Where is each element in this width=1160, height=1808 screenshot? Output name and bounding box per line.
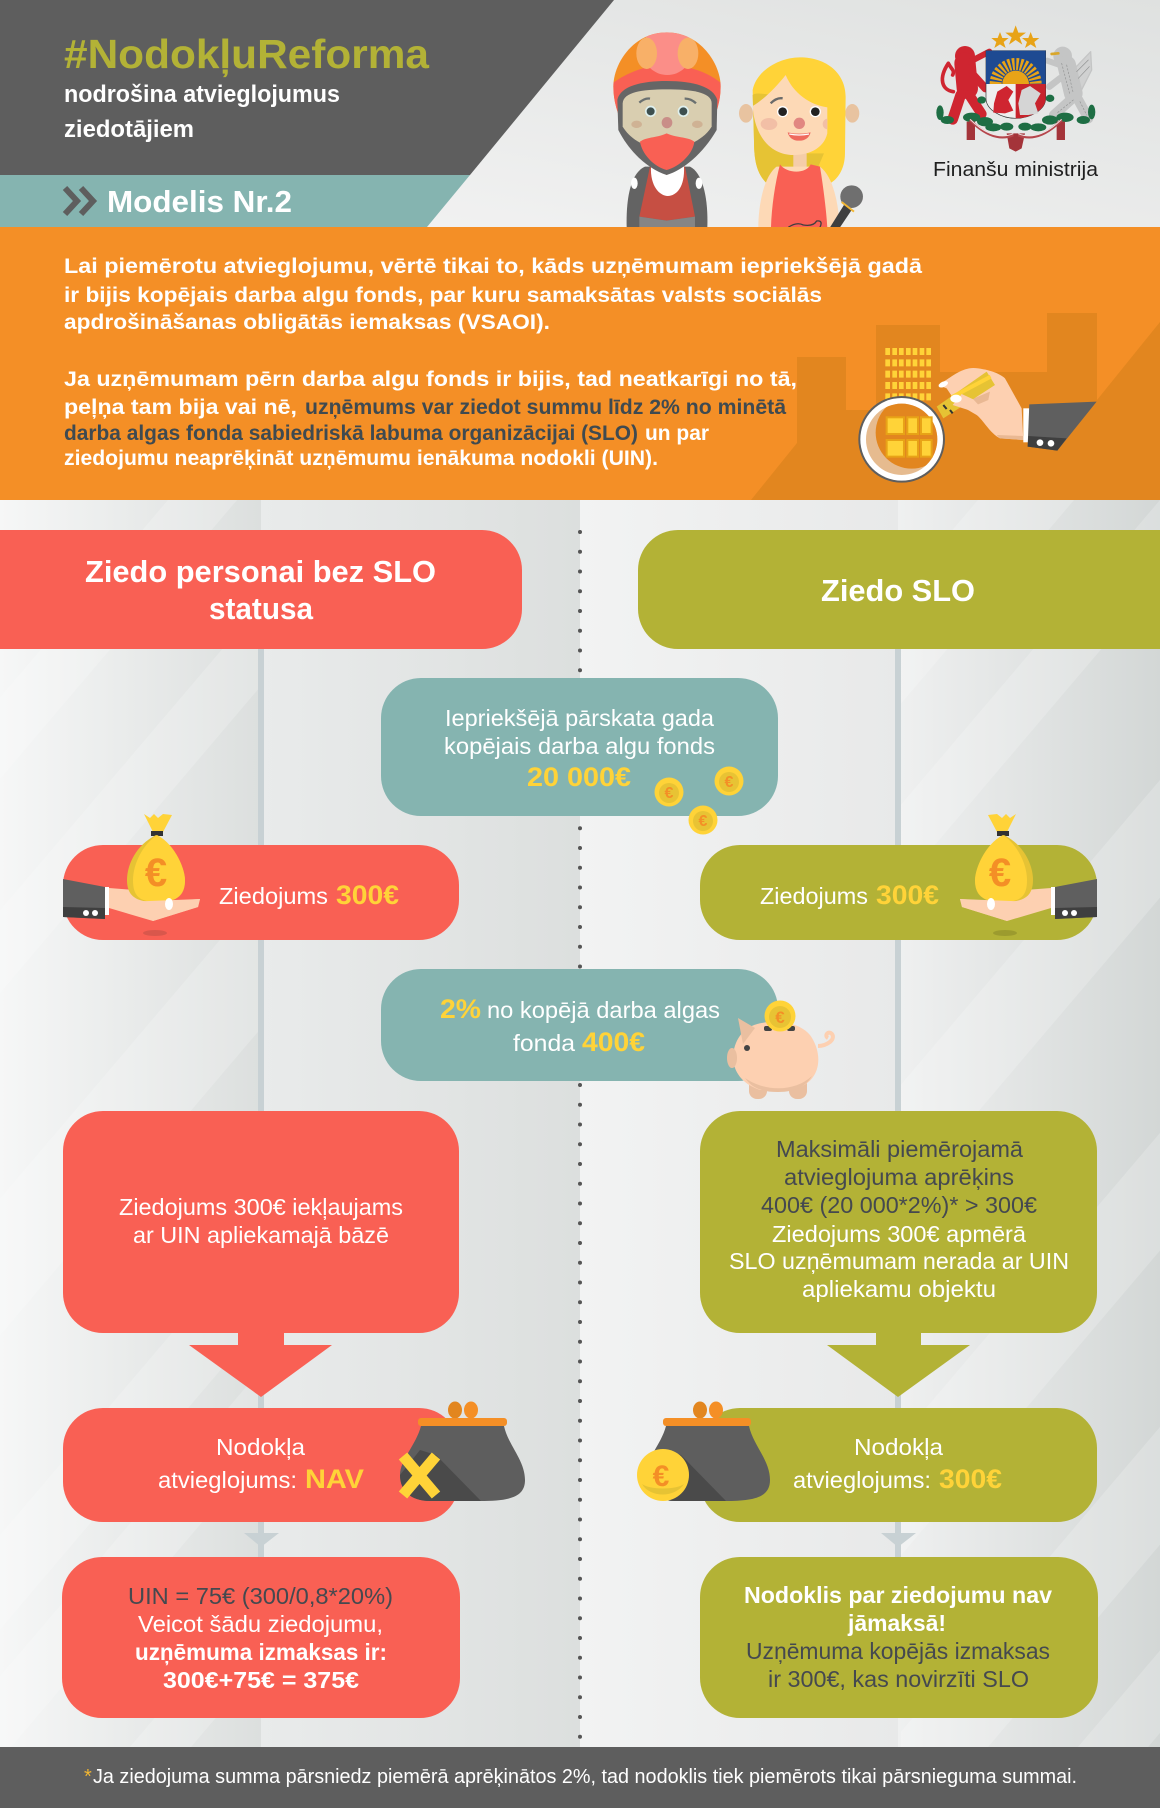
- box: right calculation: Ziedojums 300€ apmērā: [772, 1221, 1026, 1247]
- box: two percent: no kopējā darba algas: [487, 997, 720, 1023]
- footer note: [0, 1747, 1160, 1808]
- heading: left column: Ziedo personai bez SLO: [85, 554, 436, 589]
- intro paragraph 1: Lai piemērotu atvieglojumu, vērtē tikai to, kāds uzņēmumam iepriekšējā gadā: [64, 255, 922, 278]
- icon: coat of arms of Latvia: [936, 25, 1095, 152]
- icon: shield: [986, 51, 1046, 118]
- icon: ribbon: [967, 119, 1065, 152]
- box: two percent: [381, 969, 833, 1099]
- icon: piggy bank: [727, 1000, 833, 1099]
- box: right calculation: 400€ (20 000*2%)* > 300€: [761, 1192, 1037, 1218]
- box: right donation: [700, 814, 1097, 940]
- icon: stars: [991, 25, 1039, 48]
- box: two percent: 2%: [440, 994, 481, 1024]
- intro paragraph 1: ir bijis kopējais darba algu fonds, par kuru samaksātas valsts sociālās: [64, 284, 822, 307]
- icon: piggy bank: €: [775, 1008, 785, 1027]
- intro paragraph 2: darba algas fonda sabiedriskā labuma organizācijai (SLO): [64, 422, 638, 445]
- box: right donation: Ziedojums: [760, 883, 868, 909]
- box: right calculation: SLO uzņēmumam nerada ar UIN: [729, 1248, 1069, 1274]
- box: right tax relief: 300€: [939, 1464, 1002, 1494]
- footer note: *: [84, 1766, 92, 1788]
- icon: hand with magnifier: [858, 348, 1097, 483]
- subtitle: nodrošina atvieglojumus: [64, 81, 340, 108]
- intro paragraph 2: [64, 368, 797, 470]
- box: wage fund: [381, 678, 778, 834]
- icon: coins: €: [725, 774, 734, 791]
- box: right result: Nodoklis par ziedojumu nav: [744, 1582, 1052, 1608]
- box: left tax relief: atvieglojums:: [158, 1467, 297, 1493]
- box: right result: jāmaksā!: [847, 1610, 946, 1636]
- connector: left flow line: [258, 649, 264, 1557]
- subtitle: ziedotājiem: [64, 116, 194, 143]
- box: left tax relief: [63, 1402, 525, 1522]
- icon: hand with money bag: €: [989, 851, 1011, 895]
- box: right donation: 300€: [876, 880, 939, 910]
- icon: chevrons: [65, 188, 93, 214]
- box: right calculation: apliekamu objektu: [802, 1276, 996, 1302]
- box: right tax relief: Nodokļa: [854, 1434, 943, 1460]
- box: left donation: 300€: [336, 880, 399, 910]
- icon: purse with coin: [637, 1402, 770, 1501]
- box: left donation: Ziedojums: [219, 883, 328, 909]
- icon: coins: €: [665, 785, 674, 802]
- title: #NodokļuReforma: [64, 31, 430, 77]
- icon: coins: €: [699, 813, 708, 830]
- heading: left column: [0, 530, 522, 649]
- model band: [0, 175, 470, 227]
- icon: motorcyclist character: [610, 25, 723, 227]
- box: left tax relief: Nodokļa: [216, 1434, 305, 1460]
- header dark panel: [0, 0, 614, 175]
- ministry name: Finanšu ministrija: [933, 159, 1099, 181]
- icon: hand with money bag: [960, 814, 1097, 936]
- box: wage fund: 20 000€: [527, 762, 631, 792]
- icon: silver griffin: [1047, 47, 1092, 118]
- box: left tax relief: NAV: [305, 1464, 364, 1494]
- icon: coins: [654, 766, 744, 834]
- arrow: left small: [244, 1533, 279, 1547]
- icon: red lion: [942, 46, 989, 119]
- heading: left column: statusa: [209, 591, 314, 626]
- icon: oak wreath: [936, 95, 1095, 131]
- header background: [0, 0, 1160, 227]
- box: right result: [700, 1557, 1098, 1718]
- arrow: left large: [189, 1333, 332, 1397]
- intro paragraph 2: peļņa tam bija vai nē,: [64, 396, 297, 419]
- heading: right column: [638, 530, 1160, 649]
- city silhouette: [751, 313, 1160, 500]
- intro paragraph 2: Ja uzņēmumam pērn darba algu fonds ir bijis, tad neatkarīgi no tā,: [64, 368, 797, 391]
- box: two percent: 400€: [582, 1027, 645, 1057]
- box: wage fund: Iepriekšējā pārskata gada: [445, 705, 714, 731]
- box: right calculation: Maksimāli piemērojamā: [776, 1136, 1023, 1162]
- subtitle: [64, 81, 340, 143]
- panel: orange intro: [0, 227, 1160, 500]
- intro paragraph 1: [64, 255, 922, 334]
- box: right tax relief: [637, 1402, 1097, 1522]
- intro paragraph 1: apdrošināšanas obligātās iemaksas (VSAOI).: [64, 311, 550, 334]
- box: right result: Uzņēmuma kopējās izmaksas: [746, 1638, 1050, 1664]
- box: right tax relief: atvieglojums:: [793, 1467, 931, 1493]
- box: left calculation: [63, 1111, 459, 1333]
- arrow: right large: [827, 1333, 970, 1397]
- intro paragraph 2: un par: [645, 422, 709, 445]
- box: left calculation: ar UIN apliekamajā bāzē: [133, 1222, 389, 1248]
- box: right calculation: atvieglojuma aprēķins: [784, 1164, 1014, 1190]
- footer note: Ja ziedojuma summa pārsniedz piemērā aprēķinātos 2%, tad nodoklis tiek piemērots tikai pārsnieguma summai.: [93, 1766, 1077, 1788]
- icon: hand with money bag: [63, 814, 200, 936]
- lower section background: [0, 500, 1160, 1747]
- icon: purse with coin: €: [653, 1460, 670, 1493]
- arrow: right small: [881, 1533, 916, 1547]
- connector: right flow line: [895, 649, 901, 1557]
- box: left result: 300€+75€ = 375€: [163, 1667, 359, 1693]
- box: two percent: fonda: [513, 1030, 575, 1056]
- icon: empty purse with cross: [400, 1402, 525, 1501]
- model heading: Modelis Nr.2: [107, 184, 292, 219]
- box: left calculation: Ziedojums 300€ iekļaujams: [119, 1194, 403, 1220]
- box: wage fund: kopējais darba algu fonds: [444, 733, 715, 759]
- box: left donation: [63, 814, 459, 940]
- box: left result: [62, 1557, 460, 1718]
- box: right calculation: [700, 1111, 1097, 1333]
- icon: girl character with microphone: [739, 57, 863, 227]
- connector: dotted divider: [578, 532, 582, 1746]
- box: left result: Veicot šādu ziedojumu,: [138, 1611, 383, 1637]
- intro paragraph 2: uzņēmums var ziedot summu līdz 2% no minētā: [305, 396, 786, 419]
- intro paragraph 2: ziedojumu neaprēķināt uzņēmumu ienākuma nodokli (UIN).: [64, 447, 658, 470]
- box: left result: uzņēmuma izmaksas ir:: [135, 1639, 387, 1665]
- icon: hand with money bag: €: [145, 851, 167, 895]
- box: left result: UIN = 75€ (300/0,8*20%): [128, 1583, 393, 1609]
- box: right result: ir 300€, kas novirzīti SLO: [768, 1666, 1029, 1692]
- heading: right column: Ziedo SLO: [821, 573, 975, 608]
